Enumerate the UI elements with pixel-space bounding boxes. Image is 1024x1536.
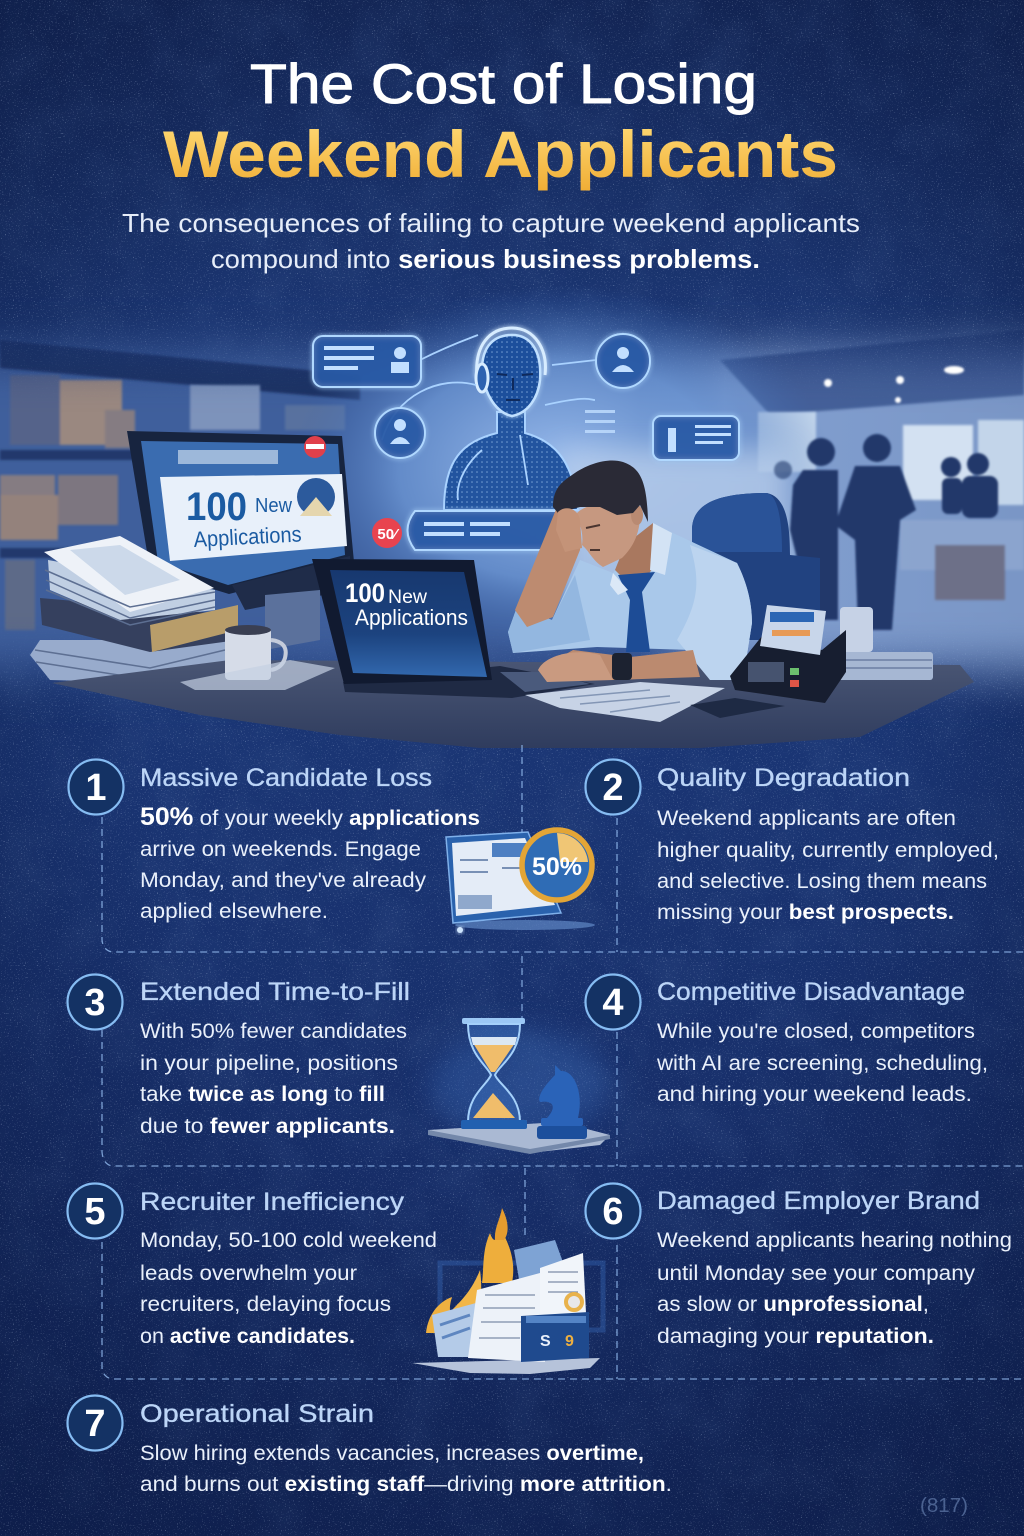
number badge 7: 7 xyxy=(84,1403,106,1445)
text 3: take twice as long to fill xyxy=(140,1083,385,1106)
desk xyxy=(52,660,974,748)
text 5: leads overwhelm your xyxy=(140,1262,357,1285)
text 7: Slow hiring extends vacancies, increases overtime, xyxy=(140,1442,644,1465)
text 5: Monday, 50-100 cold weekend xyxy=(140,1229,437,1252)
text 3: due to fewer applicants. xyxy=(140,1115,395,1138)
title xyxy=(163,52,838,191)
item 4: competitive disadvantage xyxy=(586,974,988,1106)
subtitle xyxy=(122,208,860,274)
item 7: operational strain xyxy=(68,1396,672,1496)
icon: laptop with 50% badge xyxy=(446,830,595,933)
number badge 2: 2 xyxy=(602,767,624,809)
hair xyxy=(553,461,648,522)
collar and tie xyxy=(618,572,655,652)
number badge 4: 4 xyxy=(602,982,624,1024)
number badge 3: 3 xyxy=(84,982,106,1024)
number badge 3 xyxy=(68,974,122,1030)
item 6: damaged employer brand xyxy=(586,1184,1012,1348)
recruiter xyxy=(508,461,752,680)
text 6: Weekend applicants hearing nothing xyxy=(657,1229,1012,1252)
text 7: and burns out existing staff —driving more attrition . xyxy=(140,1473,672,1496)
shirt xyxy=(508,523,752,680)
ceiling lights xyxy=(824,366,964,403)
desktop monitor: New xyxy=(255,495,293,517)
heading 7: Operational Strain xyxy=(140,1400,374,1428)
laptop: New xyxy=(388,587,427,608)
text 6 xyxy=(657,1229,1012,1348)
item 3: extended time-to-fill xyxy=(68,974,610,1154)
warehouse shelves with boxes xyxy=(0,375,345,630)
office backdrop xyxy=(0,322,1024,702)
text 2 xyxy=(657,807,999,924)
text 2: higher quality, currently employed, xyxy=(657,839,999,862)
text 2: Weekend applicants are often xyxy=(657,807,956,830)
badge: 50 xyxy=(372,518,402,548)
text 5: on active candidates. xyxy=(140,1325,355,1348)
paper stack xyxy=(30,536,238,685)
heading 5: Recruiter Inefficiency xyxy=(140,1188,405,1216)
text 5: recruiters, delaying focus xyxy=(140,1293,391,1316)
icon: burning paperwork xyxy=(412,1208,603,1374)
text 4 xyxy=(656,1020,988,1106)
icon: burning paperwork: 9 xyxy=(565,1333,574,1350)
icon: hourglass and chess knight xyxy=(428,1018,610,1154)
number badge 1: 1 xyxy=(85,767,107,809)
badge: 50: 50⁄ xyxy=(377,526,400,543)
background people xyxy=(774,434,998,630)
pale mist behind recruiter xyxy=(560,450,790,610)
desk paperwork xyxy=(525,607,933,722)
hologram glow xyxy=(290,285,830,655)
hologram card details xyxy=(324,346,731,536)
hologram cards and icons xyxy=(313,334,739,550)
number badge 7 xyxy=(68,1396,122,1450)
subtitle: compound into serious business problems. xyxy=(211,244,760,274)
number badge 4 xyxy=(586,974,640,1030)
desktop monitor: Applications xyxy=(193,521,302,552)
heading 2: Quality Degradation xyxy=(657,764,910,792)
heading 3: Extended Time-to-Fill xyxy=(140,978,410,1006)
laptop: Applications xyxy=(355,605,468,630)
laptop: 100 xyxy=(345,578,385,608)
item 1: massive candidate loss xyxy=(68,760,595,933)
number badge 1 xyxy=(68,760,124,814)
text 1: arrive on weekends. Engage xyxy=(140,838,421,861)
text 7 xyxy=(140,1442,672,1496)
text 4: with AI are screening, scheduling, xyxy=(656,1052,988,1075)
desktop monitor: 100 xyxy=(186,485,247,529)
text 2: and selective. Losing them means xyxy=(657,870,987,893)
item 5: recruiter inefficiency xyxy=(68,1184,603,1374)
desk phone xyxy=(730,605,846,703)
text 1: 50% of your weekly applications xyxy=(140,803,480,831)
subtitle: The consequences of failing to capture weekend applicants xyxy=(122,208,860,238)
text 6: damaging your reputation. xyxy=(657,1325,934,1348)
number badge 5: 5 xyxy=(84,1191,106,1233)
recruiter forearm and watch xyxy=(538,650,700,682)
text 6: as slow or unprofessional , xyxy=(657,1293,929,1316)
icon: burning paperwork: S xyxy=(540,1333,551,1350)
hero illustration: overwhelmed recruiter at desk xyxy=(0,270,1024,748)
text 3 xyxy=(140,1020,407,1138)
text 6: until Monday see your company xyxy=(657,1262,976,1285)
heading 6: Damaged Employer Brand xyxy=(657,1187,980,1215)
AI hologram figure xyxy=(382,328,596,510)
dashed dividers xyxy=(102,745,1024,1379)
text 5 xyxy=(140,1229,437,1348)
icon: laptop with 50% badge: 50% xyxy=(532,853,582,881)
text 4: and hiring your weekend leads. xyxy=(657,1083,972,1106)
laptop xyxy=(312,559,595,698)
text 2: missing your best prospects. xyxy=(657,901,954,924)
number badge 2 xyxy=(586,760,640,814)
text 1 xyxy=(140,803,480,923)
title: The Cost of Losing xyxy=(250,52,757,115)
item 2: quality degradation xyxy=(586,760,999,924)
number badge 6: 6 xyxy=(602,1191,624,1233)
neck and face xyxy=(615,523,660,590)
title: Weekend Applicants xyxy=(163,117,838,191)
chair xyxy=(692,493,820,640)
text 1: applied elsewhere. xyxy=(140,900,328,923)
text 1: Monday, and they've already xyxy=(140,869,427,892)
number badge 6 xyxy=(586,1184,640,1238)
heading 4: Competitive Disadvantage xyxy=(657,978,965,1006)
desktop monitor xyxy=(127,431,354,650)
text 3: in your pipeline, positions xyxy=(140,1052,398,1075)
mug xyxy=(180,625,335,690)
footer number: (817) xyxy=(920,1495,968,1517)
heading 1: Massive Candidate Loss xyxy=(140,764,432,792)
number badge 5 xyxy=(68,1184,122,1238)
raised arm xyxy=(515,507,580,627)
text 3: With 50% fewer candidates xyxy=(140,1020,407,1043)
text 4: While you're closed, competitors xyxy=(657,1020,975,1043)
hand on head xyxy=(556,508,582,552)
